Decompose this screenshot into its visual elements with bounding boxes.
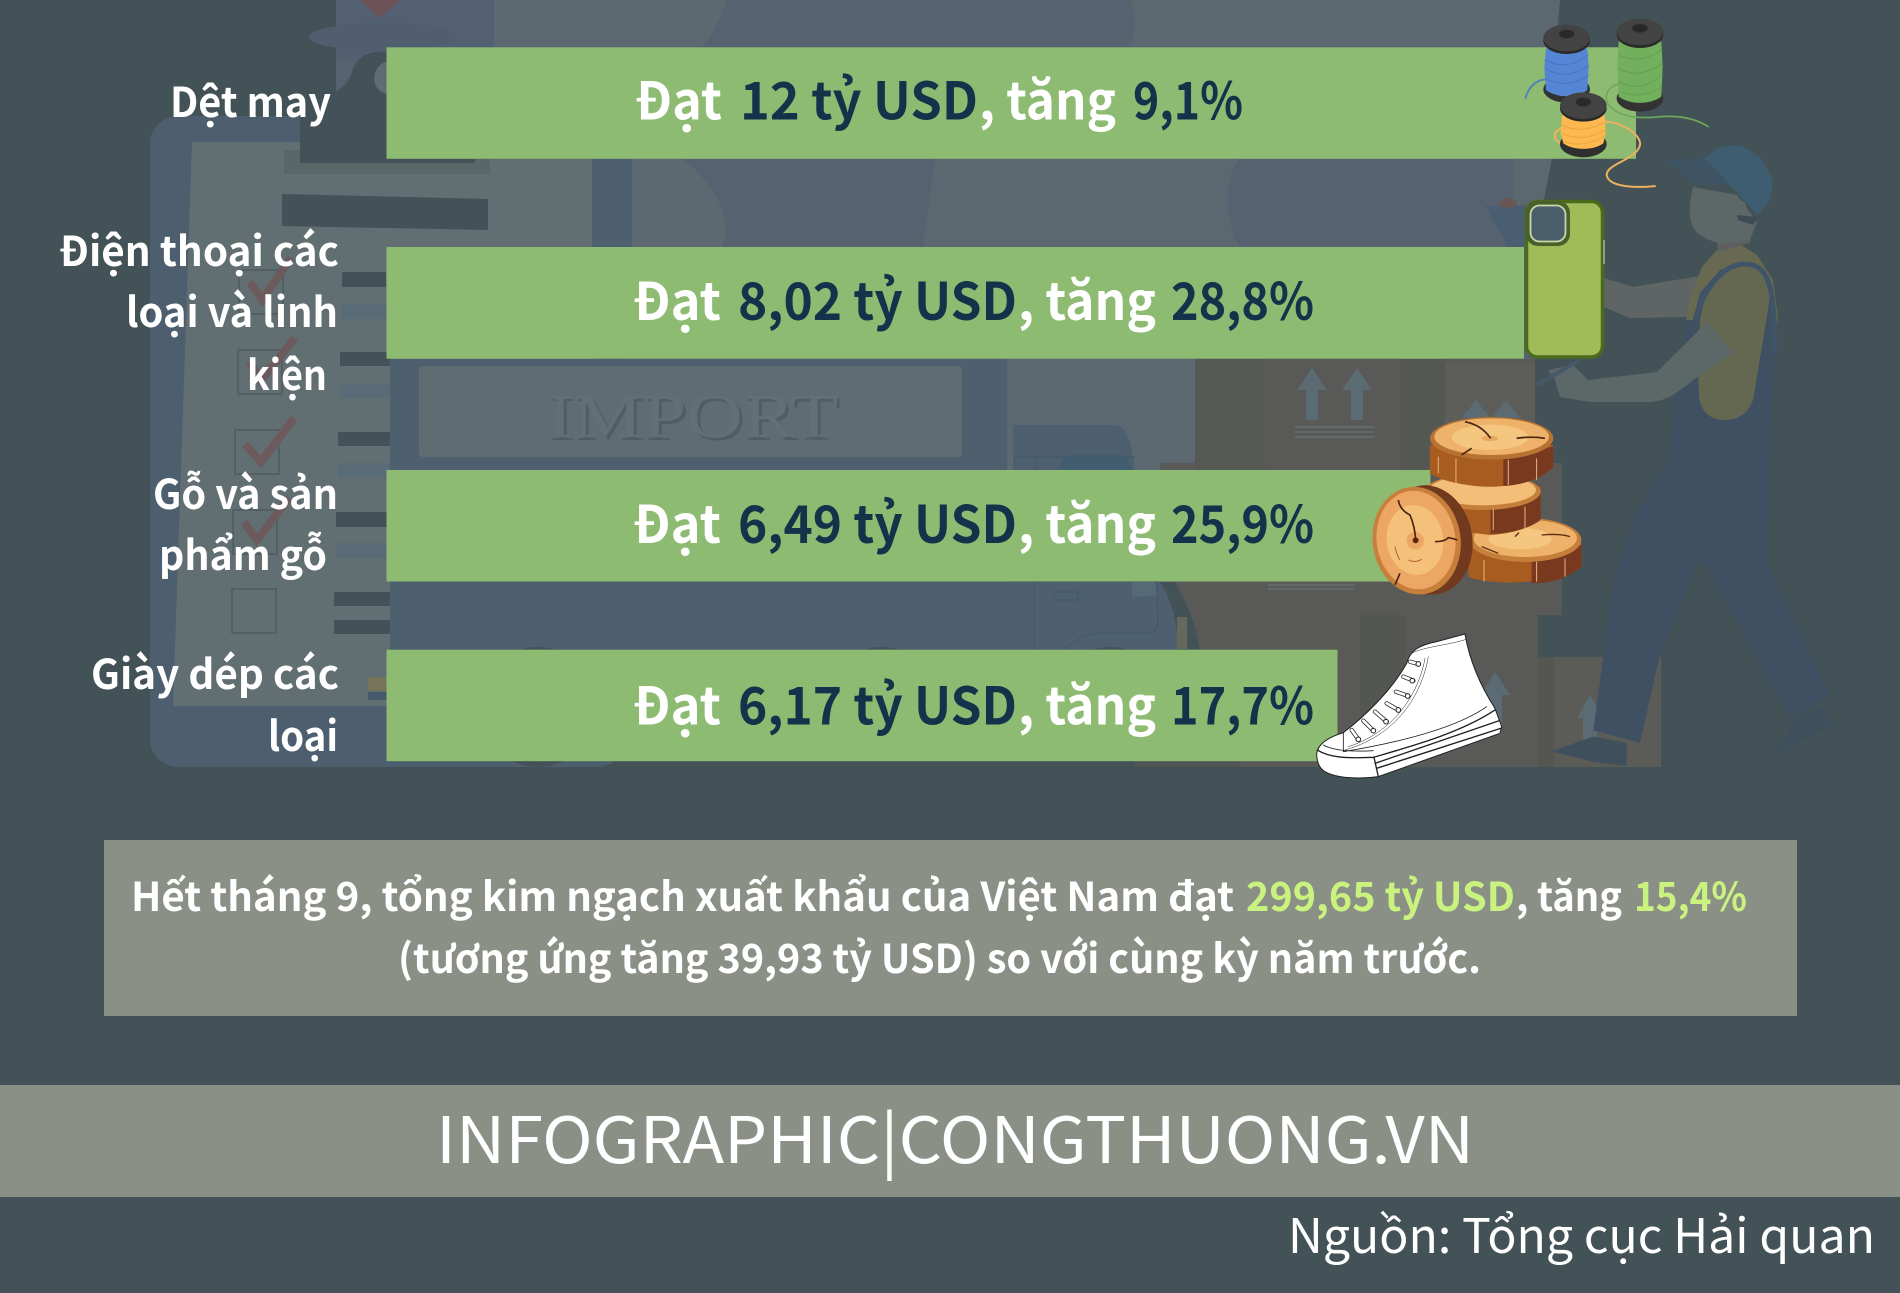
middle log — [1425, 473, 1541, 535]
row 1 value: Đạt — [635, 60, 722, 134]
metal clip — [300, 52, 392, 163]
row 3 value: 25,9% — [1171, 483, 1314, 558]
worker front foot — [1552, 737, 1627, 766]
row 4 label: loại — [268, 703, 338, 763]
row 4 value — [633, 664, 1314, 740]
row 3 label: Gỗ và sản — [153, 461, 338, 521]
summary line 1: 15,4% — [1634, 865, 1747, 923]
shoe laces — [1352, 662, 1421, 742]
worker shirt — [1698, 265, 1770, 420]
footer band — [0, 1085, 1900, 1197]
worker overalls — [1593, 265, 1830, 743]
row 1 value: , tăng — [979, 60, 1116, 134]
bar: Gỗ — [386, 470, 1430, 582]
row 3 value: Đạt — [633, 483, 721, 558]
shoe sole lines — [1317, 710, 1501, 777]
top log — [1430, 417, 1553, 487]
summary line 1: , tăng — [1516, 865, 1622, 923]
orange thread end — [1605, 122, 1656, 187]
footer title: INFOGRAPHIC|CONGTHUONG.VN — [436, 1090, 1474, 1182]
phone camera lens — [1530, 206, 1566, 242]
worker clipboard — [1485, 198, 1530, 247]
paper sheet — [173, 142, 594, 706]
worker neck — [1717, 228, 1750, 252]
summary line 1: Hết tháng 9, tổng kim ngạch xuất khẩu của Việt Nam đạt — [131, 865, 1234, 923]
title bar — [282, 194, 488, 230]
cap brim — [1665, 158, 1730, 185]
worker shirt collar — [1686, 243, 1778, 347]
illustration: cardboard boxes — [1135, 359, 1661, 767]
row 2 value: , tăng — [1018, 260, 1156, 335]
blue thread end — [1525, 79, 1545, 99]
worker strap — [1695, 264, 1775, 355]
row 4 label — [91, 641, 339, 763]
list lines — [334, 272, 390, 634]
row 3 label — [153, 461, 338, 582]
import text: IMPORT — [547, 383, 838, 451]
row 2 label — [59, 218, 339, 402]
cap dome — [1704, 145, 1773, 215]
bar: Giày dép — [386, 650, 1338, 761]
pen — [1537, 360, 1580, 385]
row 2 value — [633, 260, 1314, 335]
orange spool — [1555, 92, 1607, 157]
row 3 label: phẩm gỗ — [159, 522, 327, 582]
hat stand — [336, 0, 494, 60]
box arrows — [1297, 368, 1603, 745]
row 2 value: 28,8% — [1171, 260, 1314, 335]
row 1 value: 12 tỷ USD — [740, 60, 978, 134]
icon: sneaker — [1317, 634, 1502, 778]
row 1 label: Dệt may — [170, 69, 331, 129]
front log slab — [1366, 478, 1481, 602]
wheels — [478, 647, 598, 767]
row 2 label: kiện — [247, 342, 327, 402]
box lines — [1268, 427, 1375, 589]
bar: Điện thoại — [386, 247, 1524, 359]
row 2 label: loại và linh — [126, 279, 338, 339]
hat brim — [309, 23, 455, 51]
worker back arm — [1604, 276, 1700, 318]
red marker — [360, 0, 400, 18]
summary panel — [104, 840, 1797, 1016]
shoe collar and stitching — [1345, 639, 1466, 750]
row 1 value: 9,1% — [1133, 60, 1243, 134]
summary line 2: (tương ứng tăng 39,93 tỷ USD) so với cùng kỳ năm trước. — [398, 927, 1481, 985]
summary line 1 — [131, 865, 1747, 923]
icon: phone case — [1526, 201, 1605, 357]
row 1 value — [635, 60, 1243, 134]
row 4 value: Đạt — [633, 664, 721, 740]
headlight — [1177, 617, 1187, 649]
checkbox list — [232, 270, 283, 633]
row 4 label: Giày dép các — [91, 641, 339, 701]
illustration: truck — [390, 359, 1187, 767]
cab lower — [1007, 582, 1178, 650]
icon: wood logs — [1366, 417, 1582, 602]
check marks — [244, 258, 295, 540]
green thread end — [1606, 84, 1709, 127]
import text shadow: IMPORT — [550, 386, 841, 454]
illustration: clipboard — [150, 0, 632, 767]
worker beard — [1737, 215, 1758, 225]
row 3 value: , tăng — [1018, 483, 1156, 558]
phone camera bump — [1526, 201, 1570, 246]
worker back foot — [1770, 707, 1835, 760]
clip shadow — [284, 150, 490, 174]
source: Nguồn: Tổng cục Hải quan — [1288, 1197, 1875, 1267]
worker front arm — [1548, 322, 1733, 402]
shoe silhouette — [1317, 634, 1502, 778]
worker head — [1690, 187, 1757, 243]
shoe toe cap — [1323, 707, 1487, 752]
row 4 value: 17,7% — [1171, 664, 1314, 740]
illustration: worker — [1537, 145, 1835, 766]
icon: thread spools — [1525, 19, 1709, 187]
row 4 value: , tăng — [1018, 664, 1156, 740]
summary line 1: 299,65 tỷ USD — [1246, 865, 1515, 923]
blue spool — [1543, 25, 1590, 103]
clipboard stripe — [592, 158, 632, 248]
row 4 value: 6,17 tỷ USD — [738, 664, 1017, 740]
row 2 label: Điện thoại các — [59, 218, 339, 278]
bottom log — [1468, 518, 1582, 583]
bar: Dệt may — [386, 47, 1636, 159]
cab roof — [1013, 425, 1135, 470]
row 3 value: 6,49 tỷ USD — [738, 483, 1017, 558]
illustration: warehouse wall — [336, 0, 1560, 480]
green spool — [1617, 19, 1663, 112]
row 2 value: 8,02 tỷ USD — [738, 260, 1017, 335]
cab door — [1034, 582, 1158, 650]
row 2 value: Đạt — [633, 260, 721, 335]
row 3 value — [633, 483, 1314, 558]
import plate — [419, 366, 962, 457]
